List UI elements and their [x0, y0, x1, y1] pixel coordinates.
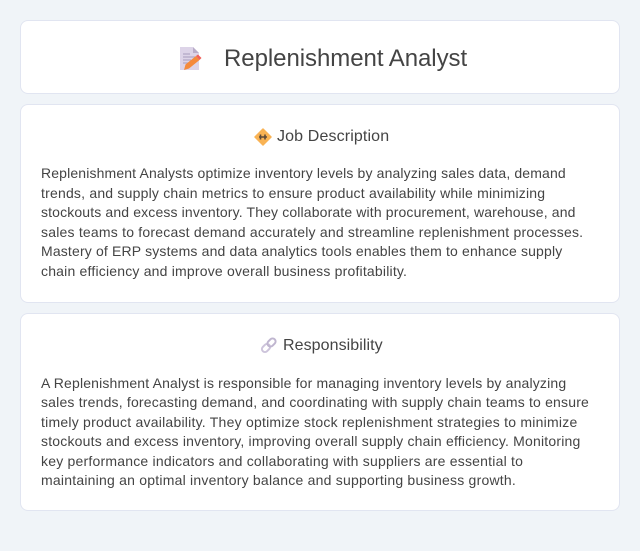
panel: job description — [20, 104, 620, 303]
text block: responsibility: key performance indicators and collaborating with suppliers are essential to — [41, 453, 523, 469]
text block: job description: Mastery of ERP systems and data analytics tools enables them to enhance supply — [41, 243, 562, 259]
icon: orange diamond — [254, 128, 272, 146]
text block: job description: chain efficiency and improve overall business profitability. — [41, 263, 407, 279]
text block: job description: trends, and supply chain metrics to ensure product availability while minimizing — [41, 185, 545, 201]
heading: responsibility: Responsibility — [283, 337, 383, 354]
panel: responsibility — [20, 313, 620, 511]
text block: job description — [41, 165, 583, 279]
panel: title card — [20, 20, 620, 94]
text block: job description: stockouts and excess inventory. They collaborate with procurement, warehouse, and — [41, 204, 576, 220]
text block: responsibility: maintaining an optimal inventory balance and supporting business growth. — [41, 472, 516, 488]
icon: chain link — [261, 338, 276, 353]
text block: responsibility: stockouts and excess inventory, improving overall supply chain efficiency. Monitoring — [41, 433, 580, 449]
icon: document with pencil — [180, 47, 202, 70]
title: Replenishment Analyst — [224, 45, 467, 72]
text block: responsibility: timely product availability. They optimize stock replenishment strategies to minimize — [41, 414, 577, 430]
text block: job description: Replenishment Analysts optimize inventory levels by analyzing sales data, demand — [41, 165, 566, 181]
heading: job description: Job Description — [277, 128, 389, 145]
text block: responsibility: sales trends, forecasting demand, and coordinating with supply chain teams to ensure — [41, 394, 589, 410]
text block: job description: sales teams to forecast demand accurately and streamline replenishment processes. — [41, 224, 583, 240]
text block: responsibility — [41, 375, 589, 488]
text block: responsibility: A Replenishment Analyst is responsible for managing inventory levels by analyzing — [41, 375, 566, 391]
